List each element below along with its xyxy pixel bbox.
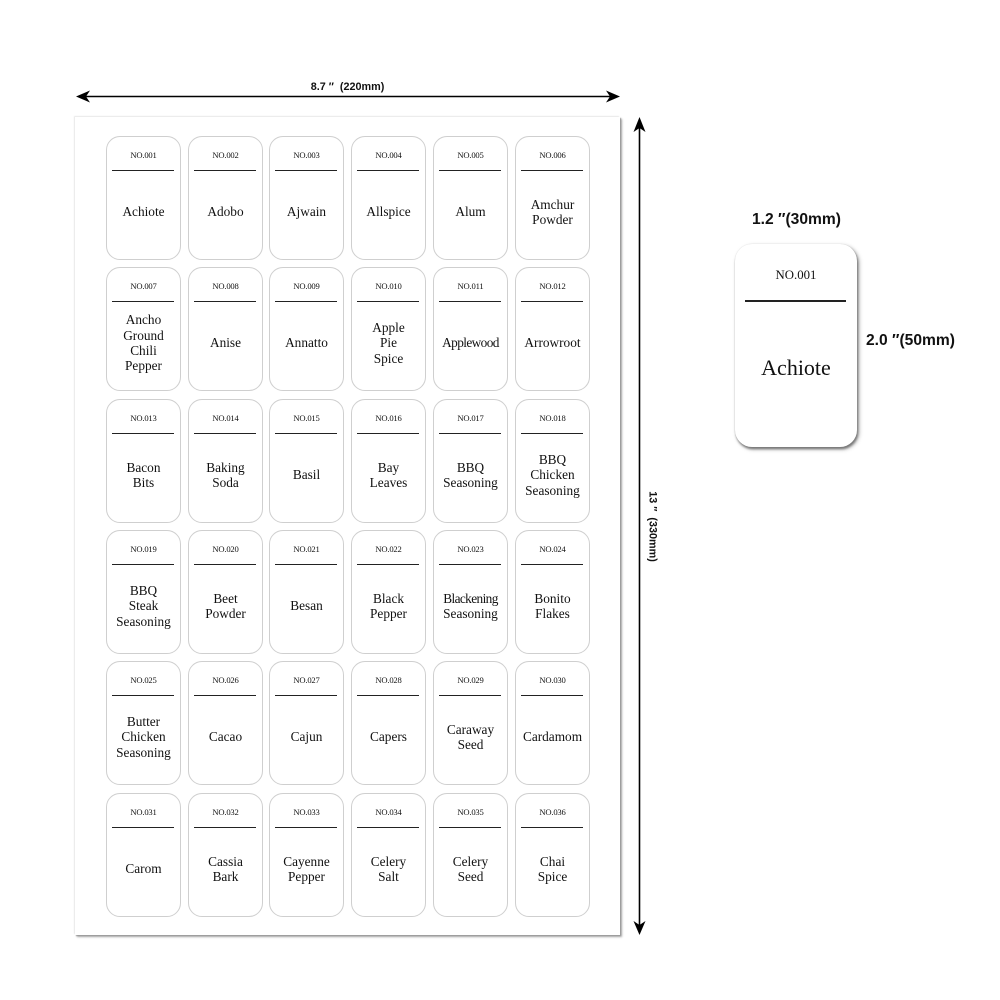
label 013 xyxy=(106,399,181,523)
label 026: Cacao xyxy=(209,729,242,744)
label 036: NO.036 xyxy=(539,807,566,817)
label 008 xyxy=(188,267,263,391)
sample number: NO.001 xyxy=(776,268,816,282)
label 034: NO.034 xyxy=(375,807,402,817)
label 002 xyxy=(188,136,263,260)
label 001: Achiote xyxy=(122,204,165,219)
label 026 xyxy=(188,661,263,785)
label 036 xyxy=(515,793,590,917)
label 033: Cayenne xyxy=(283,854,330,869)
label 025: Butter xyxy=(127,714,160,729)
enlarged label width text: 1.2 ″(30mm) xyxy=(752,211,841,228)
label 010 xyxy=(351,267,426,391)
label 016: NO.016 xyxy=(375,413,402,423)
label 019: Steak xyxy=(129,598,158,613)
height dimension text: 13 ″ (330mm) xyxy=(646,491,658,562)
label 012: Arrowroot xyxy=(524,335,581,350)
label 012 xyxy=(515,267,590,391)
label 016: Bay xyxy=(378,460,399,475)
label 013: NO.013 xyxy=(130,413,157,423)
label 021: Besan xyxy=(290,598,323,613)
label 022: Pepper xyxy=(370,606,407,621)
label 027: Cajun xyxy=(291,729,322,744)
label 029 xyxy=(433,661,508,785)
enlarged label height text: 2.0 ″(50mm) xyxy=(866,332,955,349)
label 003: Ajwain xyxy=(287,204,326,219)
label 002: NO.002 xyxy=(212,150,239,160)
label 006 xyxy=(515,136,590,260)
label 035: NO.035 xyxy=(457,807,484,817)
label 011: Applewood xyxy=(442,335,499,350)
label 015 xyxy=(269,399,344,523)
label 023: Blackening xyxy=(443,591,498,606)
label 010: Apple xyxy=(372,320,405,335)
label 009: Annatto xyxy=(285,335,328,350)
label 020: Beet xyxy=(213,591,238,606)
label 019: NO.019 xyxy=(130,544,157,554)
label 006: NO.006 xyxy=(539,150,566,160)
label 025: NO.025 xyxy=(130,675,157,685)
label 007: NO.007 xyxy=(130,281,157,291)
label 032: Bark xyxy=(213,869,238,884)
label 025: Chicken xyxy=(121,729,166,744)
label 018 xyxy=(515,399,590,523)
label 021: NO.021 xyxy=(293,544,320,554)
label 024 xyxy=(515,530,590,654)
label 005: NO.005 xyxy=(457,150,484,160)
label 025: Seasoning xyxy=(116,745,171,760)
label 006: Powder xyxy=(532,212,573,227)
sample name: Achiote xyxy=(761,355,831,380)
label 031: Carom xyxy=(125,861,162,876)
label 029: Caraway xyxy=(447,722,494,737)
label 013: Bacon xyxy=(126,460,160,475)
label 006: Amchur xyxy=(531,197,574,212)
label 001 xyxy=(106,136,181,260)
label 018: Chicken xyxy=(530,467,575,482)
label 032 xyxy=(188,793,263,917)
label 013: Bits xyxy=(133,475,154,490)
label 033 xyxy=(269,793,344,917)
label 033: Pepper xyxy=(288,869,325,884)
label 015: NO.015 xyxy=(293,413,320,423)
label 010: Spice xyxy=(374,351,403,366)
label 019: Seasoning xyxy=(116,614,171,629)
label 031: NO.031 xyxy=(130,807,157,817)
label 017: Seasoning xyxy=(443,475,498,490)
label 032: Cassia xyxy=(208,854,243,869)
label 030: NO.030 xyxy=(539,675,566,685)
label 024: Flakes xyxy=(535,606,570,621)
label 035: Seed xyxy=(458,869,483,884)
label 008: Anise xyxy=(210,335,241,350)
label 020: Powder xyxy=(205,606,246,621)
label 007: Chili xyxy=(130,343,157,358)
label 034: Celery xyxy=(371,854,406,869)
label 010: Pie xyxy=(380,335,397,350)
label 023 xyxy=(433,530,508,654)
label 016 xyxy=(351,399,426,523)
label 009 xyxy=(269,267,344,391)
label 007: Pepper xyxy=(125,358,162,373)
label 036: Chai xyxy=(540,854,565,869)
label 022: NO.022 xyxy=(375,544,402,554)
label 024: NO.024 xyxy=(539,544,566,554)
label 021 xyxy=(269,530,344,654)
label 029: NO.029 xyxy=(457,675,484,685)
label 026: NO.026 xyxy=(212,675,239,685)
label 034: Salt xyxy=(378,869,399,884)
label 014: Soda xyxy=(212,475,239,490)
arrow: sheet height xyxy=(634,117,646,935)
label 023: Seasoning xyxy=(443,606,498,621)
label 035: Celery xyxy=(453,854,488,869)
label 023: NO.023 xyxy=(457,544,484,554)
width dimension text: 8.7 ″ (220mm) xyxy=(311,81,384,93)
label 004: NO.004 xyxy=(375,150,402,160)
label 010: NO.010 xyxy=(375,281,402,291)
label 014: NO.014 xyxy=(212,413,239,423)
label 018: Seasoning xyxy=(525,483,580,498)
label 007 xyxy=(106,267,181,391)
label 032: NO.032 xyxy=(212,807,239,817)
label 022 xyxy=(351,530,426,654)
label 030 xyxy=(515,661,590,785)
label 016: Leaves xyxy=(370,475,407,490)
label 028: NO.028 xyxy=(375,675,402,685)
label 034 xyxy=(351,793,426,917)
label 018: NO.018 xyxy=(539,413,566,423)
label 015: Basil xyxy=(293,467,320,482)
label 019 xyxy=(106,530,181,654)
label 020: NO.020 xyxy=(212,544,239,554)
label 020 xyxy=(188,530,263,654)
label 018: BBQ xyxy=(539,452,566,467)
label 003: NO.003 xyxy=(293,150,320,160)
label 012: NO.012 xyxy=(539,281,566,291)
label 014: Baking xyxy=(206,460,245,475)
label 017: BBQ xyxy=(457,460,484,475)
label 007: Ancho xyxy=(126,312,161,327)
label 036: Spice xyxy=(538,869,567,884)
label 005: Alum xyxy=(455,204,486,219)
label 031 xyxy=(106,793,181,917)
label 005 xyxy=(433,136,508,260)
label 024: Bonito xyxy=(534,591,571,606)
label 029: Seed xyxy=(458,737,483,752)
label 003 xyxy=(269,136,344,260)
label 002: Adobo xyxy=(207,204,244,219)
label 028: Capers xyxy=(370,729,407,744)
label 035 xyxy=(433,793,508,917)
label 033: NO.033 xyxy=(293,807,320,817)
label 001: NO.001 xyxy=(130,150,157,160)
label 025 xyxy=(106,661,181,785)
label 009: NO.009 xyxy=(293,281,320,291)
label 030: Cardamom xyxy=(523,729,582,744)
label 011: NO.011 xyxy=(458,281,483,291)
label 008: NO.008 xyxy=(212,281,239,291)
label 004 xyxy=(351,136,426,260)
label 004: Allspice xyxy=(366,204,411,219)
label 028 xyxy=(351,661,426,785)
label 014 xyxy=(188,399,263,523)
label 027: NO.027 xyxy=(293,675,320,685)
sheet with label grid xyxy=(75,117,620,935)
label 027 xyxy=(269,661,344,785)
enlarged sample label xyxy=(735,244,857,447)
sample rule xyxy=(745,300,846,302)
label 017: NO.017 xyxy=(457,413,484,423)
label 017 xyxy=(433,399,508,523)
label 019: BBQ xyxy=(130,583,157,598)
arrow: sheet width xyxy=(76,90,620,102)
label 022: Black xyxy=(373,591,404,606)
label 011 xyxy=(433,267,508,391)
label 007: Ground xyxy=(123,328,164,343)
